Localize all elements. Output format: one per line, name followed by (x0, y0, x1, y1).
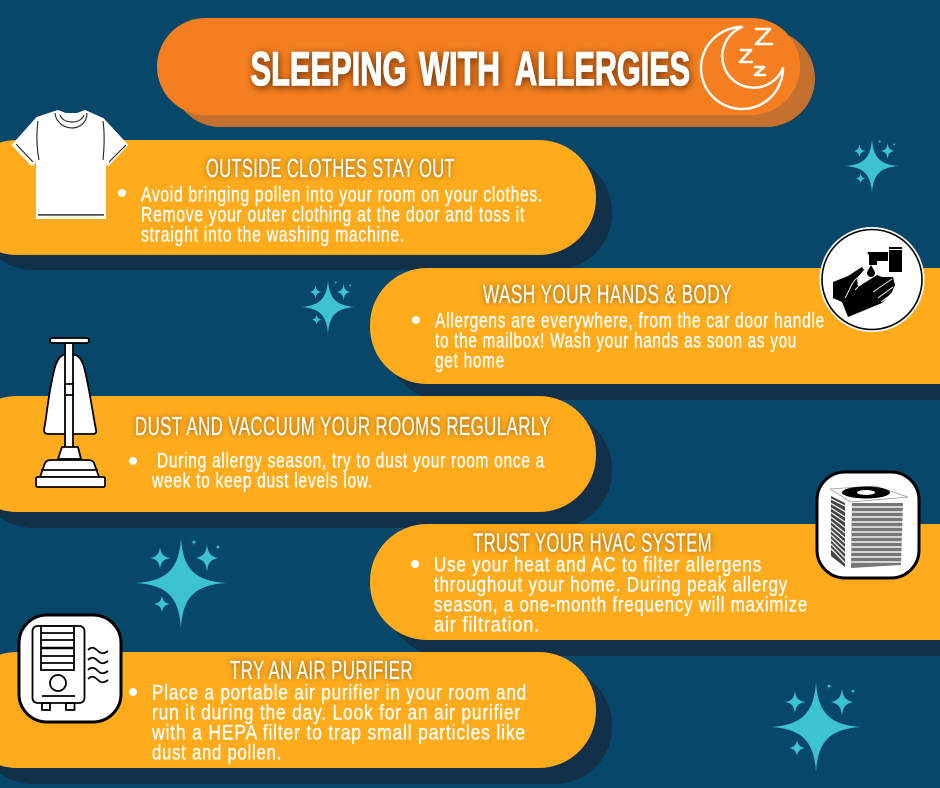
text: dust and vacuum: During allergy season, try to dust your room once a (157, 450, 545, 472)
title: ALLERGIES (515, 43, 690, 96)
text: HVAC (411, 554, 808, 636)
text: dust and vacuum (129, 450, 545, 492)
title banner (157, 18, 815, 127)
text: air purifier (129, 682, 527, 764)
text: HVAC: throughout your home. During peak allergy (434, 574, 788, 596)
heading: air purifier: TRY AN AIR PURIFIER (230, 657, 413, 685)
text: wash hands: get home (435, 350, 505, 372)
title: SLEEPING (250, 43, 406, 96)
sparkles: top right (845, 139, 899, 193)
sparkles: lower left (136, 538, 226, 628)
icon: HVAC unit (817, 472, 919, 578)
icon: vacuum (36, 338, 105, 487)
text: air purifier: Place a portable air purifier in your room and (152, 682, 527, 704)
text: HVAC: Use your heat and AC to filter allergens (434, 554, 762, 576)
title (250, 43, 690, 96)
text: outside clothes (118, 184, 543, 246)
panel: wash hands (370, 268, 940, 400)
heading: outside clothes: OUTSIDE CLOTHES STAY OUT (206, 155, 455, 183)
panel: HVAC (370, 524, 940, 656)
sparkles: bottom right (771, 682, 861, 772)
text: air purifier: run it during the day. Look for an air purifier (152, 702, 521, 724)
text: HVAC: season, a one-month frequency will maximize (434, 594, 808, 616)
text: outside clothes: Remove your outer clothing at the door and toss it (141, 204, 525, 226)
text: wash hands: to the mailbox! Wash your hands as soon as you (435, 330, 797, 352)
text: dust and vacuum: week to keep dust levels low. (151, 470, 373, 492)
heading: HVAC: TRUST YOUR HVAC SYSTEM (473, 530, 712, 558)
icon: air purifier (19, 615, 121, 722)
heading: dust and vacuum: DUST AND VACCUUM YOUR ROOMS REGULARLY (135, 413, 551, 441)
text: outside clothes: straight into the washing machine. (141, 224, 405, 246)
text: air purifier: dust and pollen. (152, 742, 282, 764)
panel: dust and vacuum (0, 396, 612, 528)
icon: t-shirt (13, 111, 127, 218)
panel: outside clothes (0, 140, 612, 270)
text: outside clothes: Avoid bringing pollen into your room on your clothes. (141, 184, 543, 206)
text: air purifier: with a HEPA filter to trap small particles like (151, 722, 526, 744)
icon: washing hands (820, 227, 924, 332)
text: wash hands (412, 310, 825, 372)
text: HVAC: air filtration. (434, 614, 540, 636)
sparkles: upper middle (301, 280, 355, 334)
panel: air purifier (0, 652, 612, 784)
heading: wash hands: WASH YOUR HANDS & BODY (483, 281, 732, 309)
icon: moon with zzz (701, 27, 783, 109)
title: WITH (419, 43, 500, 96)
